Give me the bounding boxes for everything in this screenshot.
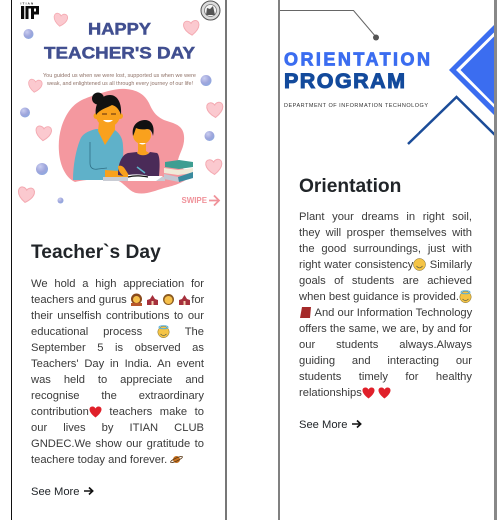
- icon: college seal: [201, 1, 220, 20]
- text block: Orientation description: when best guidance is provided.: [299, 291, 459, 303]
- hearts: [17, 13, 224, 204]
- text block: Teacher's Day description: Teachers' Day in India. An event: [31, 358, 204, 370]
- poster message: [43, 73, 196, 87]
- department label: DEPARTMENT OF INFORMATION TECHNOLOGY: [284, 103, 428, 109]
- text block: Teacher's Day description: was held to appreciate and: [31, 374, 204, 386]
- text block: Orientation description: guiding and interacting our: [299, 355, 472, 367]
- illustration: teacher: [73, 92, 127, 180]
- link: See More: See More: [299, 419, 348, 431]
- poster message: weak, and enlightened us all through every journey of our life!: [47, 81, 193, 87]
- text block: Teacher's Day description: September 5 is observed as: [31, 342, 204, 354]
- geometric diamonds: [408, 24, 495, 144]
- text block: Teacher's Day description: teachere today and forever.: [31, 454, 167, 466]
- link: See More: See More: [31, 486, 80, 498]
- text block: Orientation description: goals of students are achieved: [299, 275, 472, 287]
- heading: Orientation: ORIENTATION: [284, 50, 430, 70]
- panel: Teacher's Day card: [11, 0, 227, 520]
- poster: Happy Teacher's Day: [18, 0, 224, 206]
- text block: Orientation description: [299, 211, 472, 399]
- text block: Teacher's Day description: their unselfish contributions to our: [31, 310, 204, 322]
- illustration: stack of books: [164, 160, 193, 182]
- text block: Teacher's Day description: our lives by ITIAN CLUB: [31, 422, 204, 434]
- illustration: open book and desk: [103, 174, 165, 181]
- poster: Orientation Program: [280, 10, 494, 145]
- text block: Teacher's Day description: We hold a high appreciation for: [31, 278, 204, 290]
- text block: Teacher's Day description: teachers and gurus for: [31, 294, 204, 306]
- text block: Teacher's Day description: [31, 278, 204, 466]
- icon: ITIAN club logo: ITIAN: [20, 2, 34, 6]
- heading: Orientation: Orientation: [299, 176, 401, 197]
- illustration: student: [118, 120, 160, 177]
- text block: Orientation description: And our Information Technology: [314, 307, 472, 319]
- decorative connector with dot: [279, 10, 379, 40]
- heading: Happy Teacher's Day: HAPPY: [88, 20, 152, 38]
- swipe label with arrow: [182, 195, 219, 206]
- text block: Orientation description: relationships: [299, 387, 362, 399]
- poster message: You guided us when we were lost, supported us when we were: [43, 73, 196, 79]
- text block: Teacher's Day description: recognise the extraordinary: [31, 390, 204, 402]
- text block: Teacher's Day description: GNDEC.We show our gratitude to: [31, 438, 204, 450]
- text block: Orientation description: the good surroundings, just with: [299, 243, 472, 255]
- text block: Teacher's Day description: educational process The: [31, 326, 204, 338]
- heading: Teacher's Day: Teacher`s Day: [31, 242, 161, 263]
- text block: Orientation description: students timely for healthy: [299, 371, 472, 383]
- swipe label with arrow: SWIPE: [182, 195, 207, 205]
- heading: Happy Teacher's Day: [44, 20, 196, 62]
- heading: Happy Teacher's Day: TEACHER'S DAY: [44, 44, 196, 62]
- text block: Orientation description: our students always.Always: [299, 339, 472, 351]
- icon: ITIAN club logo: [20, 2, 39, 19]
- spheres: [20, 29, 214, 204]
- text block: Orientation description: right water consistency Similarly: [299, 259, 472, 271]
- text block: Orientation description: they will prosper themselves with: [299, 227, 472, 239]
- heading: Program: PROGRAM: [284, 69, 405, 93]
- text block: Orientation description: Plant your dreams in right soil,: [299, 211, 472, 223]
- text block: Orientation description: offers the same, we are, by and for: [299, 323, 472, 335]
- pink blob: [59, 89, 191, 194]
- text block: Teacher's Day description: contribution teachers make to: [31, 406, 204, 418]
- panel: Orientation card: [278, 0, 497, 520]
